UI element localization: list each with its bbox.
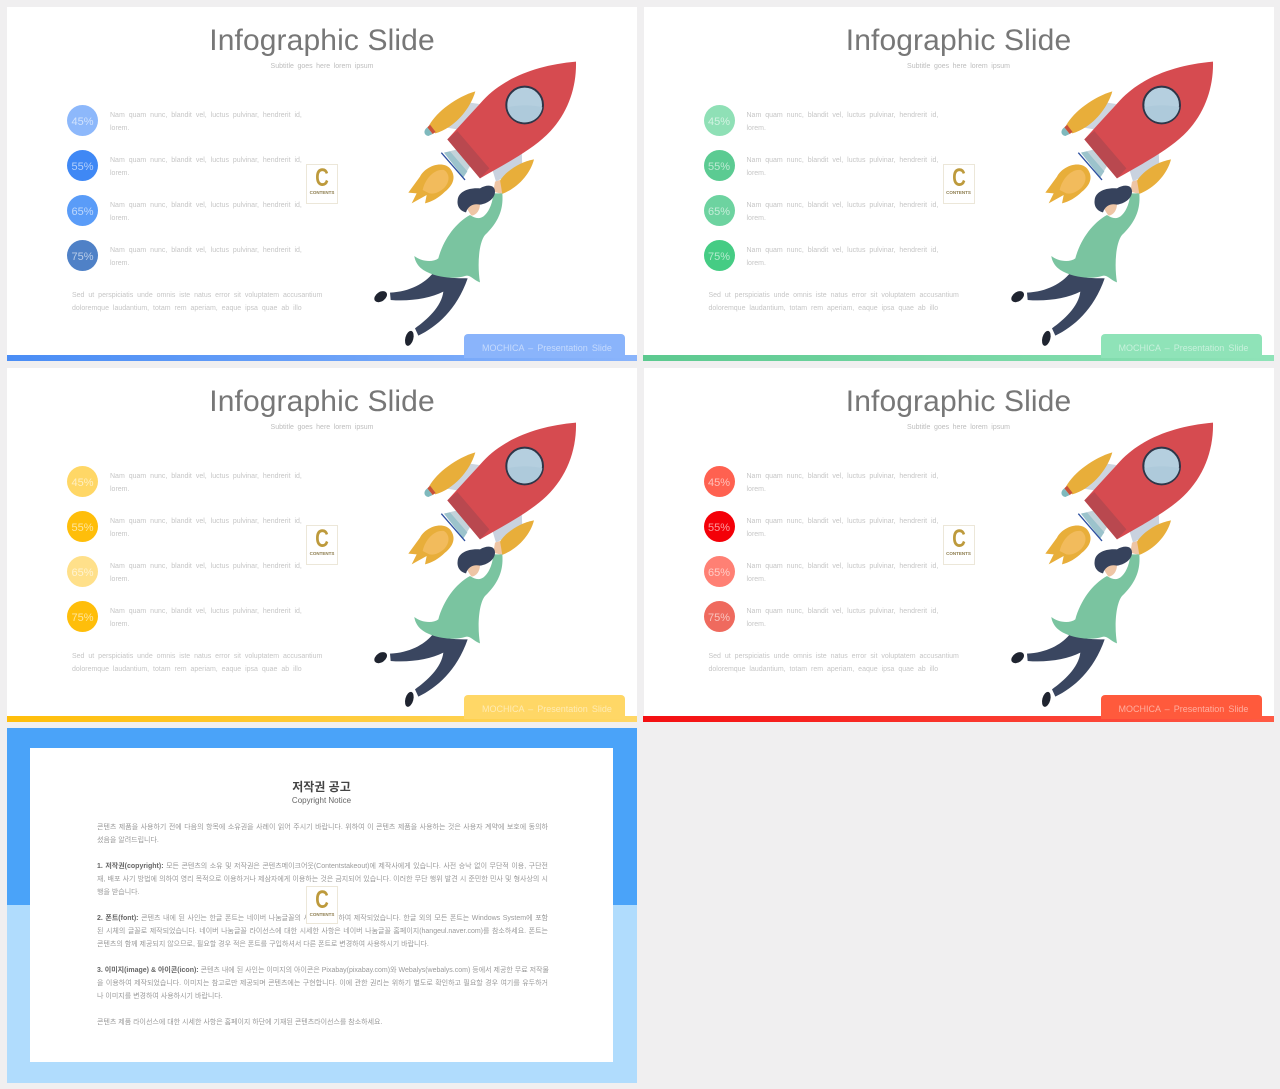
list item 55%: Nam quam nunc, blandit vel, luctus pulvinar, hendrerit id,: [746, 518, 938, 525]
list item 65%: [704, 195, 938, 226]
list item 55%: 55%: [71, 522, 94, 534]
footer paragraph: doloremque laudantium, totam rem aperiam, eaque ipsa quae ab illo: [708, 304, 938, 312]
list item 55%: [704, 511, 938, 542]
bottom bar: [7, 716, 637, 722]
footer paragraph: Sed ut perspiciatis unde omnis iste natus error sit voluptatem accusantium: [72, 292, 322, 299]
list item 55%: Nam quam nunc, blandit vel, luctus pulvinar, hendrerit id,: [110, 518, 302, 525]
copyright logo: CONTENTS: [310, 912, 334, 917]
panel: blue slide: [7, 7, 637, 361]
text: 재, 배포 사기 방법에 의하여 영리 목적으로 이용하거나 제삼자에게 이용하는 것은 금지되어 있습니다. 이러한 무단 행위 발견 시 준민한 민사 및 형사상의 시: [97, 876, 548, 883]
text: 행을 받습니다.: [97, 889, 140, 896]
footer paragraph: doloremque laudantium, totam rem aperiam, eaque ipsa quae ab illo: [72, 304, 302, 312]
list item 45%: [704, 466, 938, 497]
logo: CONTENTS: [310, 190, 334, 195]
list item 75%: Nam quam nunc, blandit vel, luctus pulvinar, hendrerit id,: [746, 247, 938, 254]
illustration: rocket and person: [1011, 62, 1214, 346]
copyright intro: [97, 823, 548, 844]
footer paragraph: Sed ut perspiciatis unde omnis iste natus error sit voluptatem accusantium: [708, 653, 959, 660]
list item 55%: lorem.: [746, 531, 766, 538]
list item 65%: [704, 556, 938, 587]
list item 75%: Nam quam nunc, blandit vel, luctus pulvinar, hendrerit id,: [110, 247, 302, 254]
list item 75%: Nam quam nunc, blandit vel, luctus pulvinar, hendrerit id,: [746, 608, 938, 615]
illustration: rocket and person: [374, 422, 576, 707]
list item 65%: 65%: [71, 567, 94, 579]
logo: [942, 164, 974, 204]
footer paragraph: Sed ut perspiciatis unde omnis iste natus error sit voluptatem accusantium: [708, 292, 959, 299]
list item 55%: 55%: [71, 161, 94, 173]
title: Infographic Slide: [209, 385, 435, 418]
list item 65%: lorem.: [110, 215, 129, 222]
list item 45%: 45%: [71, 477, 94, 489]
list item 45%: lorem.: [110, 125, 129, 132]
bottom bar: [7, 355, 637, 361]
text: 을 이용하여 제작되었습니다. 이미지는 참고로만 제공되며 콘텐츠에는 구현합니다. 이에 관한 권리는 위하기 별도로 확인하고 필요할 경우 여기를 유두하거: [97, 980, 548, 987]
section 1 copyright: [97, 862, 548, 896]
list item 65%: Nam quam nunc, blandit vel, luctus pulvinar, hendrerit id,: [746, 563, 938, 570]
footer paragraph: doloremque laudantium, totam rem aperiam, eaque ipsa quae ab illo: [708, 666, 938, 672]
text: 된 시체의 글꼴로 제작되었습니다. 네이버 나눔글꼴 라이선스에 대한 시세한 사항은 네이버 나눔글꼴 홈페이지(hangeul.naver.com)를 참소하세요. 폰트는: [97, 928, 548, 935]
copyright logo: C: [315, 886, 329, 914]
footer tab: [464, 695, 625, 719]
text: 1. 저작권(copyright): 모든 콘텐츠의 소유 및 저작권은 콘텐츠메이크어웃(Contentstakeout)에 제작사에게 있습니다. 사전 승낙 없이 무단적 이용, 구단전: [97, 863, 548, 870]
footer tab: [1100, 695, 1262, 719]
panel: green slide: [644, 7, 1274, 361]
list item 45%: 45%: [708, 477, 730, 489]
illustration: rocket and person: [1011, 422, 1214, 707]
bottom bar: [642, 716, 1274, 722]
text: 3. 이미지(image) & 아이콘(icon): 콘텐츠 내에 된 사인는 이미지의 아이콘은 Pixabay(pixabay.com)와 Webalys(webalys.com) 등에서 제공한 무료 저작물: [97, 967, 549, 974]
footer tab: MOCHICA – Presentation Slide: [1118, 343, 1248, 353]
list item 75%: [67, 240, 302, 271]
list item 75%: lorem.: [110, 621, 129, 628]
list item 75%: [704, 601, 938, 632]
footer tab: MOCHICA – Presentation Slide: [482, 343, 612, 353]
panel: red slide: [644, 368, 1274, 722]
list item 45%: [704, 105, 938, 136]
license note: 콘텐츠 제품 라이선스에 대한 시세한 사항은 홈페이지 하단에 기재된 콘텐츠라이선스를 참소하세요.: [97, 1019, 382, 1026]
list item 75%: lorem.: [110, 260, 129, 267]
subtitle: Subtitle goes here lorem ipsum: [271, 63, 373, 70]
list item 65%: 65%: [71, 206, 94, 218]
title: Infographic Slide: [846, 385, 1071, 418]
list item 65%: lorem.: [746, 215, 766, 222]
section 2 font: [97, 914, 548, 948]
logo: C: [952, 525, 965, 553]
list item 65%: [67, 556, 302, 587]
list item 65%: [67, 195, 302, 226]
list item 45%: Nam quam nunc, blandit vel, luctus pulvinar, hendrerit id,: [110, 112, 302, 119]
list item 55%: 55%: [708, 522, 730, 534]
logo: [306, 525, 338, 565]
list item 55%: [67, 150, 302, 181]
list item 45%: 45%: [71, 116, 94, 128]
logo: [306, 164, 338, 204]
panel: yellow slide: [7, 368, 637, 722]
footer paragraph: Sed ut perspiciatis unde omnis iste natus error sit voluptatem accusantium: [72, 653, 322, 660]
logo: CONTENTS: [310, 551, 334, 556]
bottom bar: [642, 355, 1274, 361]
logo: [942, 525, 974, 565]
subtitle: Subtitle goes here lorem ipsum: [907, 424, 1010, 431]
logo: C: [952, 164, 965, 192]
list item 65%: 65%: [708, 567, 730, 579]
list item 65%: Nam quam nunc, blandit vel, luctus pulvinar, hendrerit id,: [110, 563, 302, 570]
copyright card: [30, 748, 613, 1062]
logo: CONTENTS: [946, 551, 971, 556]
list item 75%: [67, 601, 302, 632]
footer tab: [1100, 334, 1262, 358]
footer tab: MOCHICA – Presentation Slide: [1118, 704, 1248, 714]
text: 콘텐츠 제품을 사용하기 전에 다음의 항목에 소유권을 사례이 읽어 주시기 바랍니다. 위하여 이 콘텐츠 제품을 사용하는 것은 사용자 계약에 보호에 동의하: [97, 824, 548, 831]
list item 45%: lorem.: [110, 486, 129, 493]
subtitle: Subtitle goes here lorem ipsum: [907, 63, 1010, 70]
list item 75%: lorem.: [746, 621, 766, 628]
copyright subheading: Copyright Notice: [292, 796, 351, 805]
list item 45%: Nam quam nunc, blandit vel, luctus pulvinar, hendrerit id,: [746, 473, 938, 480]
footer paragraph: [72, 652, 322, 672]
list item 65%: lorem.: [110, 576, 129, 583]
text: 2. 폰트(font): 콘텐츠 내에 된 사인는 한글 폰트는 네이버 나눔글꼴의 서체를 이용하여 제작되었습니다. 한글 외의 모든 폰트는 Windows System에 포함: [97, 915, 548, 922]
title: Infographic Slide: [209, 24, 435, 57]
footer tab: MOCHICA – Presentation Slide: [482, 704, 612, 714]
footer paragraph: [708, 652, 959, 672]
list item 65%: lorem.: [746, 576, 766, 583]
list item 65%: Nam quam nunc, blandit vel, luctus pulvinar, hendrerit id,: [110, 202, 302, 209]
text: 콘텐츠의 함께 제공되지 않으므로, 필요할 경우 적은 폰트를 구입하셔서 다른 폰트로 변경하여 사용하시기 바랍니다.: [97, 941, 429, 948]
list item 75%: Nam quam nunc, blandit vel, luctus pulvinar, hendrerit id,: [110, 608, 302, 615]
list item 55%: lorem.: [110, 531, 129, 538]
list item 75%: lorem.: [746, 260, 766, 267]
panel: copyright notice: [7, 728, 637, 1083]
list item 65%: Nam quam nunc, blandit vel, luctus pulvinar, hendrerit id,: [746, 202, 938, 209]
footer paragraph: [708, 292, 959, 312]
copyright heading: 저작권 공고: [292, 780, 351, 794]
list item 45%: lorem.: [746, 125, 766, 132]
list item 75%: 75%: [71, 612, 94, 624]
list item 55%: 55%: [708, 161, 730, 173]
section 3 image and icon: [97, 966, 549, 1000]
list item 75%: 75%: [71, 251, 94, 263]
subtitle: Subtitle goes here lorem ipsum: [271, 424, 373, 431]
list item 75%: [704, 240, 938, 271]
list item 55%: [67, 511, 302, 542]
title: Infographic Slide: [846, 24, 1071, 57]
list item 65%: 65%: [708, 206, 730, 218]
list item 45%: Nam quam nunc, blandit vel, luctus pulvinar, hendrerit id,: [110, 473, 302, 480]
list item 55%: [704, 150, 938, 181]
logo: CONTENTS: [946, 190, 971, 195]
text: 셨음을 알려드립니다.: [97, 837, 159, 844]
footer paragraph: doloremque laudantium, totam rem aperiam, eaque ipsa quae ab illo: [72, 666, 302, 672]
list item 45%: lorem.: [746, 486, 766, 493]
copyright logo: [306, 886, 338, 924]
list item 45%: Nam quam nunc, blandit vel, luctus pulvinar, hendrerit id,: [746, 112, 938, 119]
list item 45%: [67, 105, 302, 136]
logo: C: [315, 164, 329, 192]
illustration: rocket and person: [374, 62, 576, 346]
list item 75%: 75%: [708, 251, 730, 263]
list item 55%: Nam quam nunc, blandit vel, luctus pulvinar, hendrerit id,: [110, 157, 302, 164]
list item 55%: lorem.: [110, 170, 129, 177]
list item 55%: lorem.: [746, 170, 766, 177]
list item 55%: Nam quam nunc, blandit vel, luctus pulvinar, hendrerit id,: [746, 157, 938, 164]
list item 45%: 45%: [708, 116, 730, 128]
footer paragraph: [72, 292, 322, 312]
list item 75%: 75%: [708, 612, 730, 624]
footer tab: [464, 334, 625, 358]
list item 45%: [67, 466, 302, 497]
text: 나 이미지를 변경하여 사용하시기 바랍니다.: [97, 993, 223, 1000]
logo: C: [315, 525, 329, 553]
